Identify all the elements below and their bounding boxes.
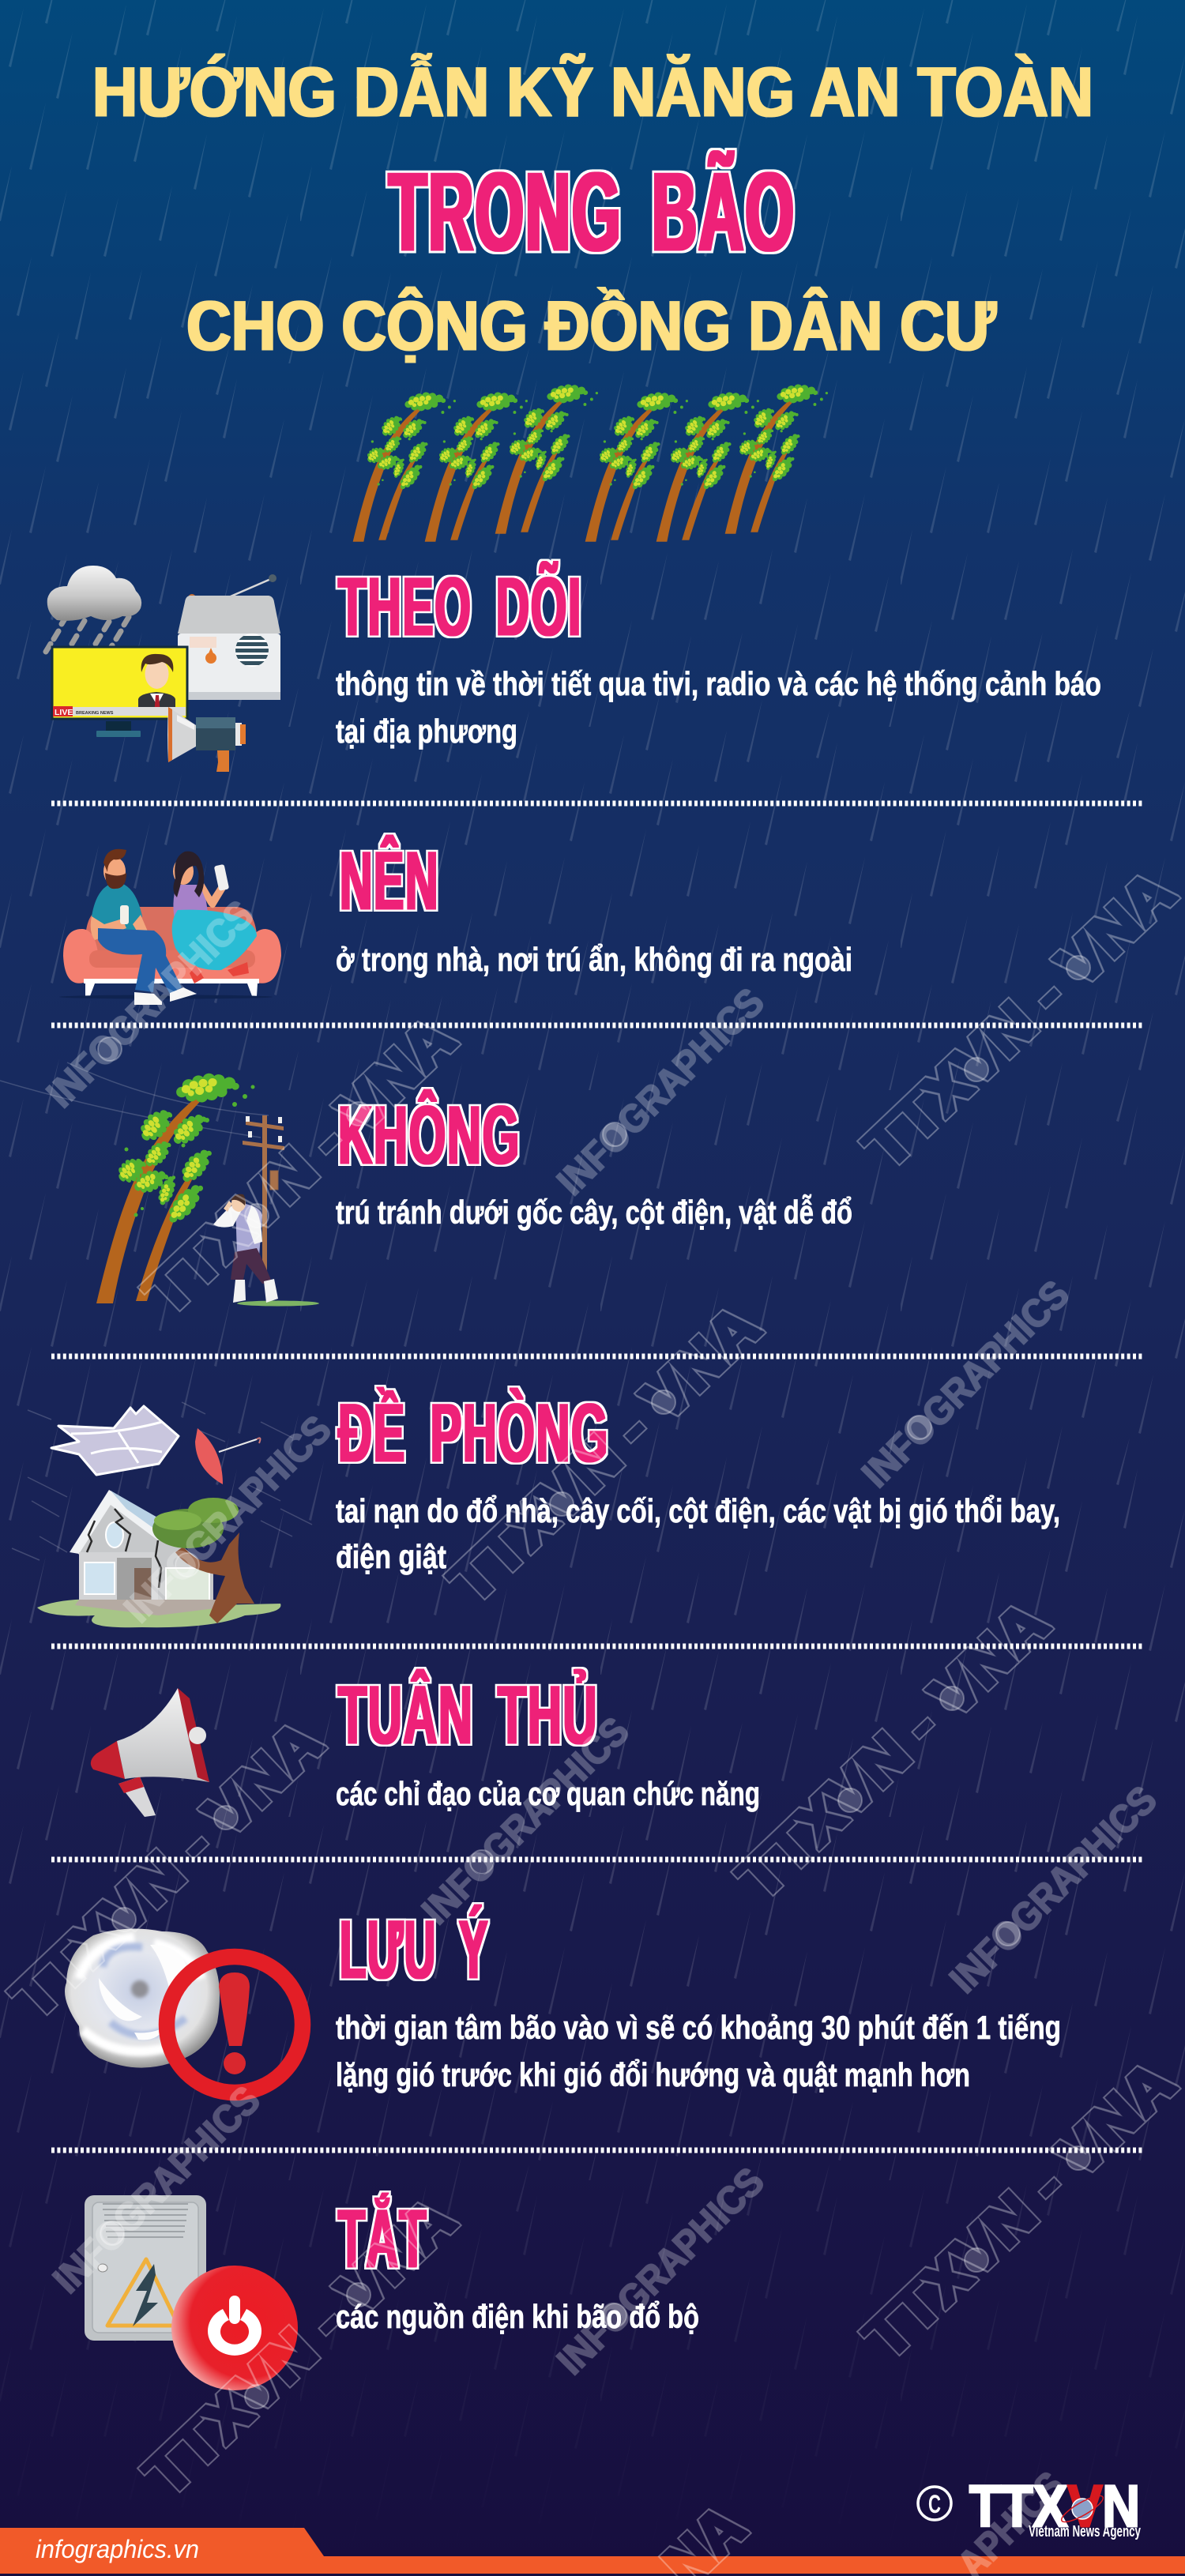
copyright symbol: C [928,2490,941,2518]
icon: typhoon and warning sign [65,1928,303,2093]
watermarks: TTXVN - VNA [851,2047,1185,2372]
icon: cloud, TV, radio, loudspeaker [46,566,280,772]
icon: flying paper, umbrella, damaged house, tree [12,1402,312,1627]
watermarks: INFOGRAPHICS [941,1777,1165,2002]
watermarks: INFOGRAPHICS [853,1272,1078,1496]
panel: tat [85,2191,699,2390]
watermarks: INFOGRAPHICS [413,1709,638,1933]
title line 3: CHO CỘNG ĐỒNG DÂN CƯ [186,286,996,365]
heading: TUÂN THỦ [338,1668,598,1762]
heading: KHÔNG [338,1089,521,1182]
title line 1: HƯỚNG DẪN KỸ NĂNG AN TOÀN [92,52,1093,131]
text block: các nguồn điện khi bão đổ bộ [336,2298,699,2335]
title [92,52,1093,365]
panel: de phong [12,1386,1060,1627]
watermarks: INFOGRAPHICS [115,1407,340,1631]
watermarks [0,856,1185,2576]
illustration: row of wind-bent trees [353,382,828,542]
icon: couple on sofa [59,849,281,1005]
text block [336,1492,1060,1575]
icon: bent trees, power pole, person [0,1062,319,1307]
text block: điện giật [336,1538,446,1575]
text block: tại địa phương [336,713,517,750]
watermarks: TTXVN - VNA [131,1002,468,1328]
heading: NÊN [340,834,439,927]
panel: theo doi [46,561,1101,772]
panel: nen [59,834,852,1005]
watermarks: INFOGRAPHICS [548,980,773,1204]
heading: ĐỀ PHÒNG [338,1386,609,1480]
text block: các chỉ đạo của cơ quan chức năng [336,1775,760,1812]
text block: lặng gió trước khi gió đổi hướng và quật mạnh hơn [336,2056,970,2093]
panel: khong [0,1062,852,1307]
text block: trú tránh dưới gốc cây, cột điện, vật dễ đổ [336,1193,852,1231]
watermarks: INFOGRAPHICS [38,892,262,1116]
panel: tuan thu [91,1668,760,1817]
logo: TTXVN Vietnam News Agency [918,2473,1142,2540]
globe emblem [1059,2491,1106,2526]
heading: TẮT [338,2191,427,2285]
watermarks: TTXVN - VNA [436,1291,773,1616]
icon: cloud, TV, radio, loudspeaker: BREAKING NEWS [76,711,114,716]
watermarks: INFOGRAPHICS [44,2078,269,2302]
watermarks: INFOGRAPHICS [548,2159,773,2383]
watermarks: TTXVN - VNA [724,1587,1062,1912]
wordmark: TTXVN [969,2473,1140,2539]
icon: red megaphone [91,1688,209,1817]
copyright symbol [918,2487,951,2520]
text block: ở trong nhà, nơi trú ẩn, không đi ra ngoài [336,941,852,978]
footer bar [0,2528,1185,2574]
panel: luu y [65,1904,1061,2093]
text block [336,2009,1061,2093]
icon: electric box and power button [85,2195,298,2390]
heading: THEO DÕI [338,561,582,653]
footer website: infographics.vn [36,2535,199,2563]
watermarks: TTXVN - VNA [131,2183,468,2509]
text block [336,665,1101,750]
watermarks: TTXVN - VNA [0,1706,336,2032]
icon: cloud, TV, radio, loudspeaker: LIVE [55,708,73,717]
watermarks: TTXVN - VNA [851,856,1185,1182]
heading: LƯU Ý [340,1904,489,1996]
title line 2: TRONG BÃO [389,149,796,275]
